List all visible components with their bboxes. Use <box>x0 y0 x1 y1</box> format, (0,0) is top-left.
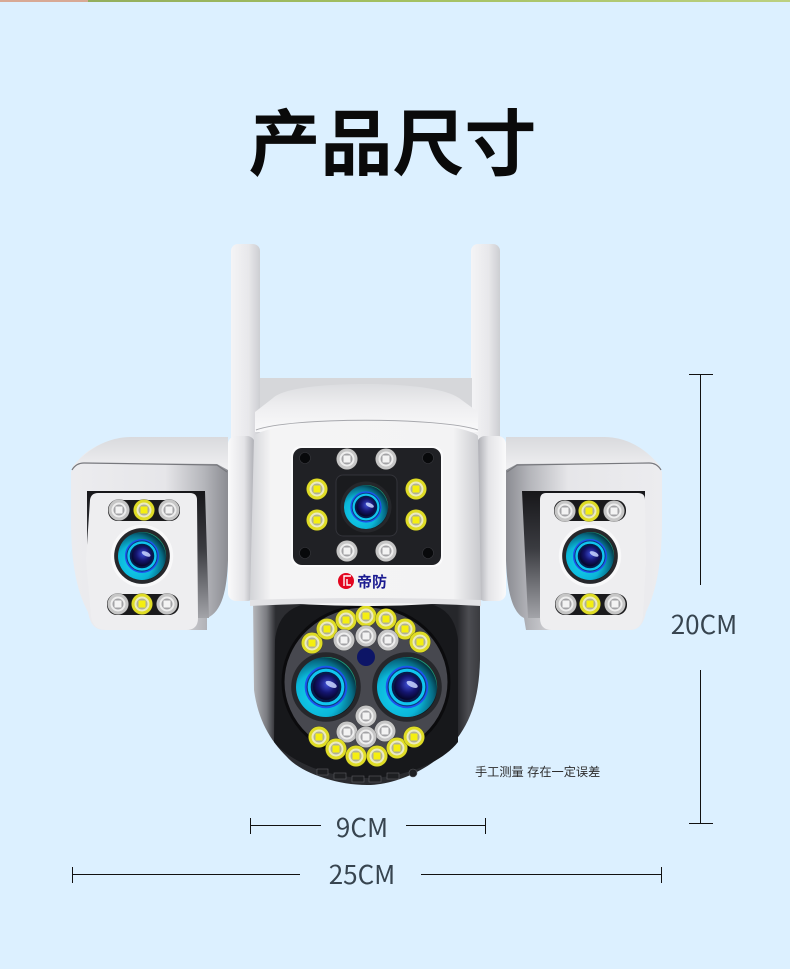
blue sensor <box>357 648 375 666</box>
lower black dome <box>253 600 480 785</box>
title: 产品尺寸 <box>248 106 537 186</box>
note: 手工测量 存在一定误差 <box>475 764 600 779</box>
LEDs <box>306 448 427 562</box>
dimension: height 20CM <box>671 374 737 824</box>
lower LED ring <box>308 705 425 767</box>
LEDs <box>554 500 626 615</box>
lens <box>111 525 173 587</box>
dimension: height 20CM: 20CM <box>671 605 737 642</box>
face plate <box>283 606 449 758</box>
top colour strip <box>0 0 790 2</box>
lens <box>559 525 621 587</box>
vents <box>317 769 417 782</box>
black front panel <box>291 446 443 567</box>
brand logo: 帝防 <box>357 573 387 591</box>
lens housing <box>336 475 397 536</box>
left antenna <box>231 244 260 444</box>
dimension: width 9CM <box>250 808 486 845</box>
LEDs <box>107 499 180 615</box>
upper LED ring <box>301 605 431 654</box>
dual lenses <box>291 652 442 722</box>
dimension: width 25CM <box>72 855 662 892</box>
brand logo <box>338 573 387 591</box>
centre body <box>250 384 481 606</box>
lens <box>340 481 392 533</box>
back plate <box>260 378 472 428</box>
dimension: width 25CM: 25CM <box>329 855 395 892</box>
right antenna <box>471 244 500 444</box>
dimension: width 9CM: 9CM <box>336 808 388 845</box>
screws <box>300 452 434 558</box>
right camera <box>477 436 662 630</box>
camera product image <box>71 244 662 785</box>
left camera <box>71 436 255 630</box>
